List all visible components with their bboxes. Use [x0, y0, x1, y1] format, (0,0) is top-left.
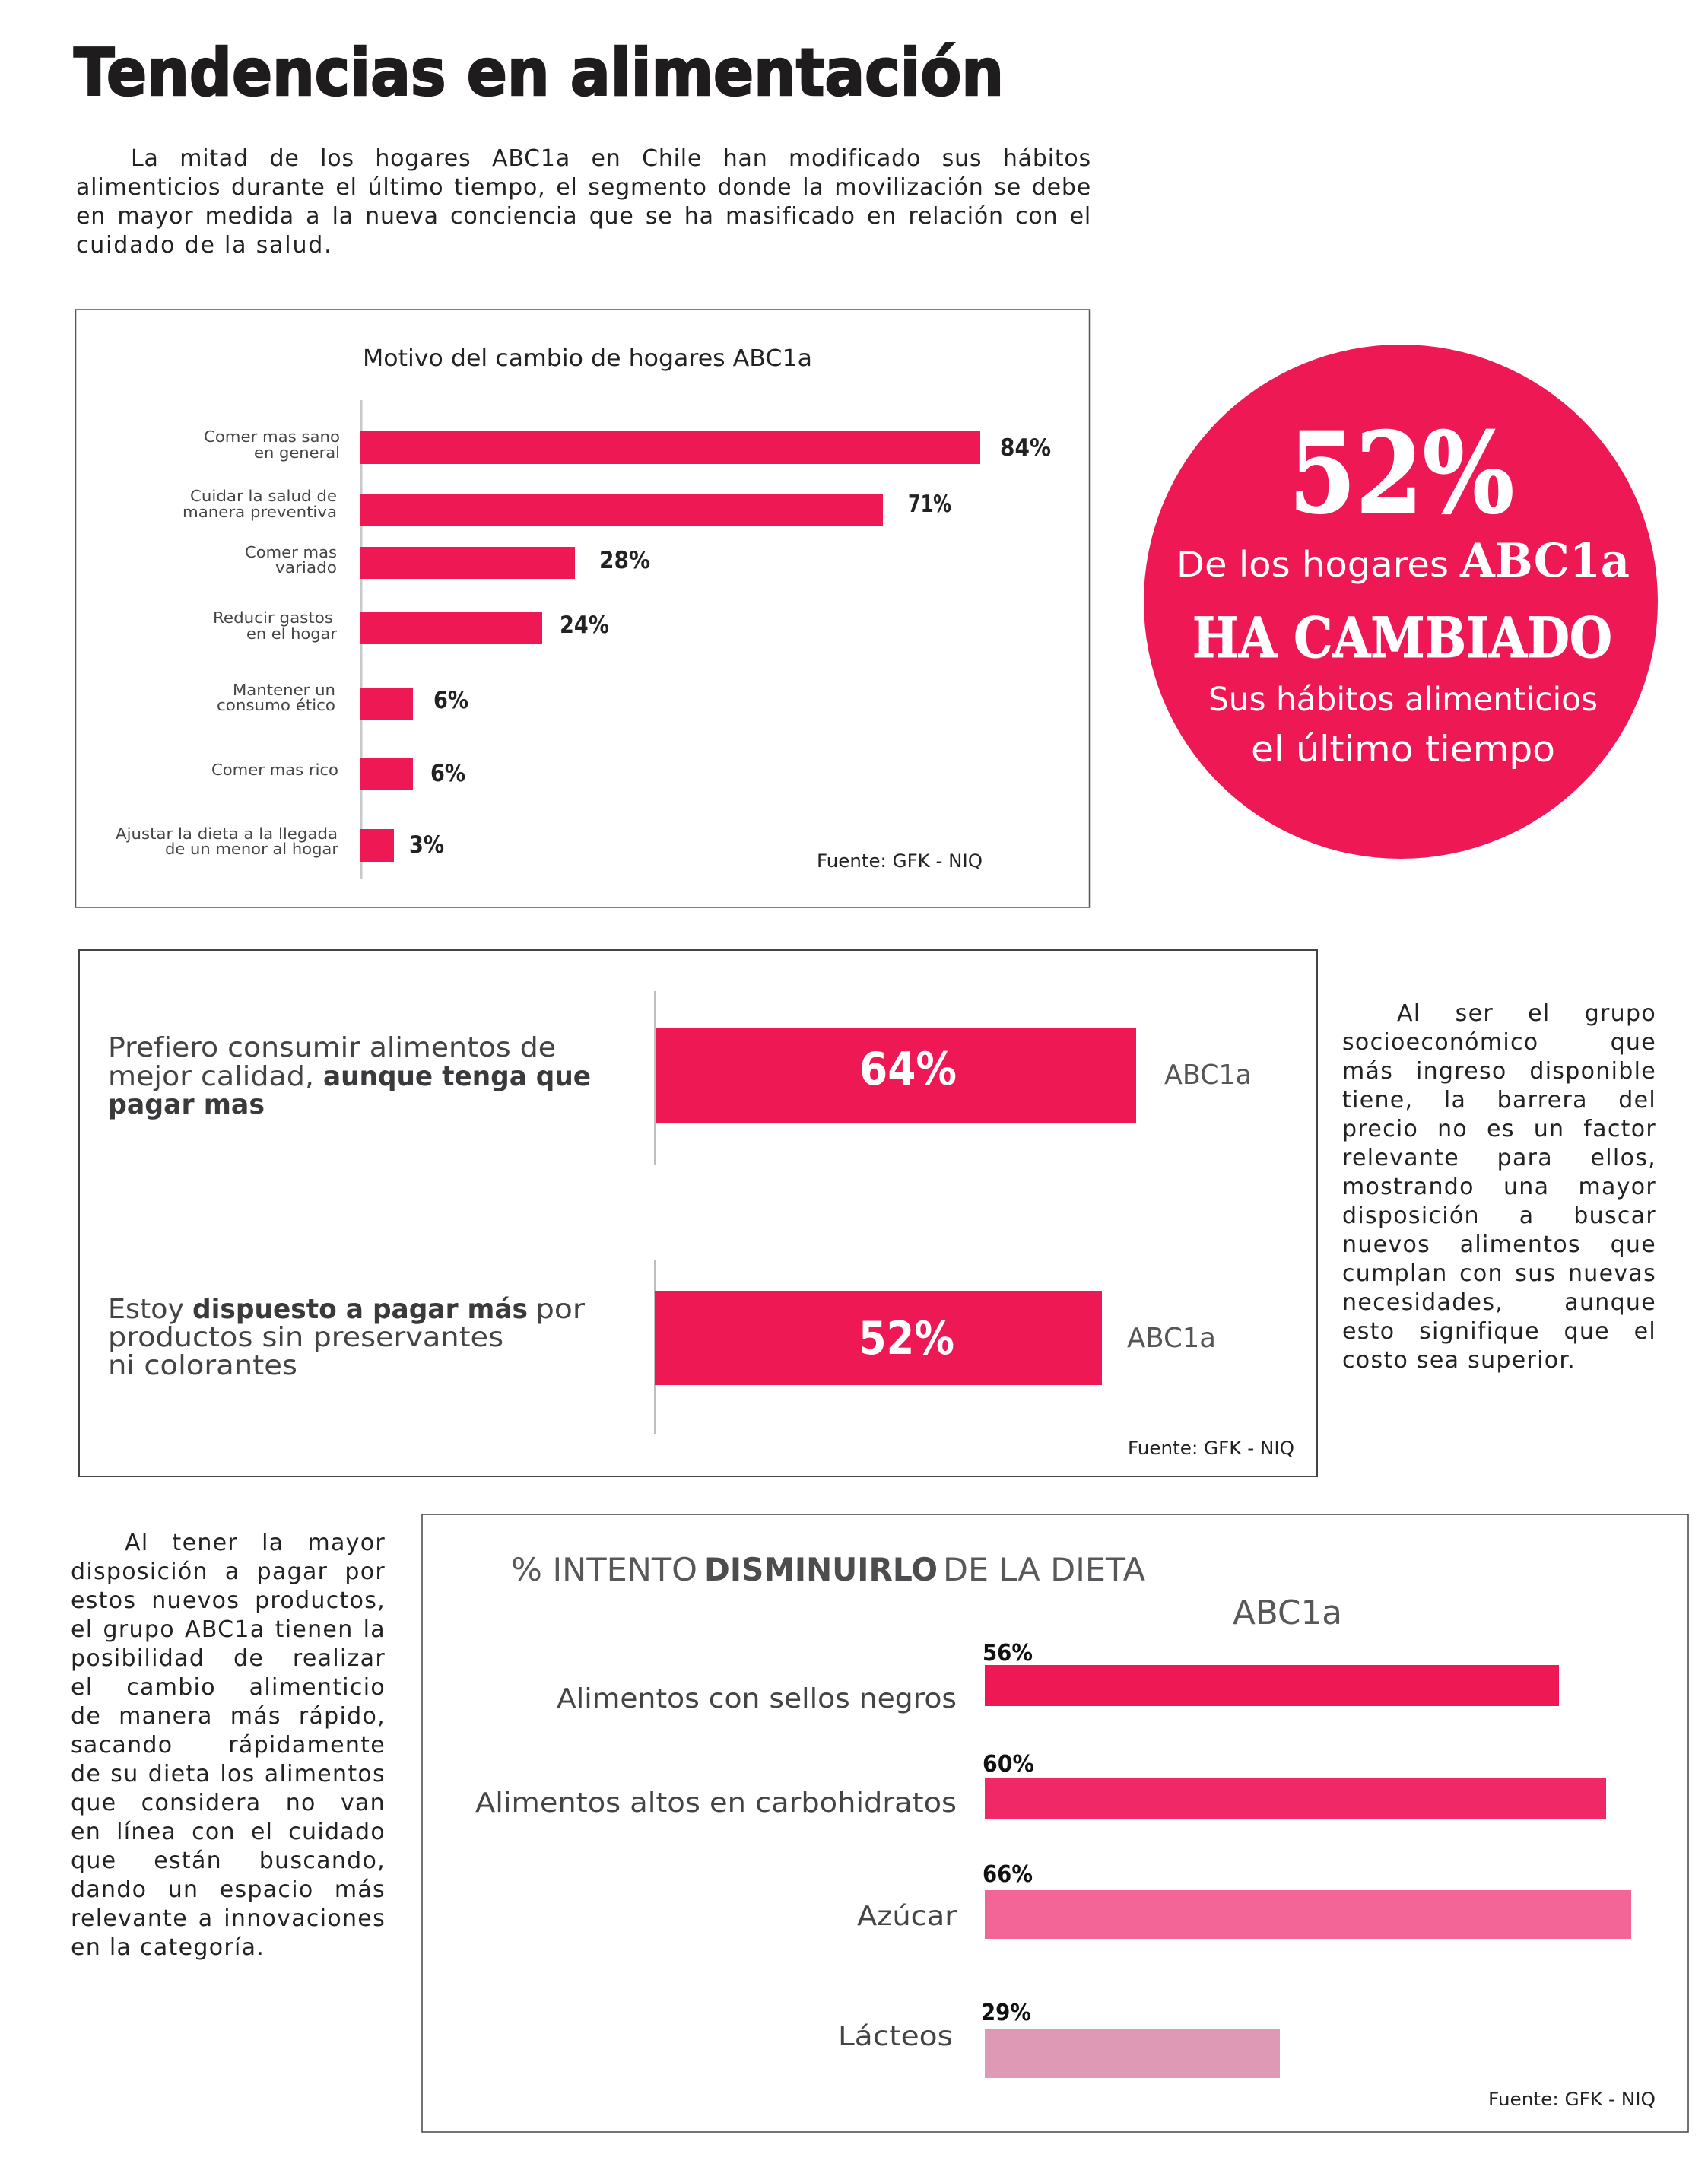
right paragraph: relevante para ellos, [1342, 1145, 1656, 1171]
bar: comer mas sano [204, 427, 1051, 464]
panel: disposicion a pagar [79, 950, 1317, 1476]
bar: sellos negros: Alimentos con sellos negros [557, 1683, 957, 1714]
bar: comer mas variado [245, 543, 650, 579]
bar 52% [655, 1291, 1216, 1385]
right paragraph: Al ser el grupo [1397, 1000, 1656, 1027]
intro paragraph: alimenticios durante el último tiempo, el segmento donde la movilización se debe [76, 174, 1091, 201]
chart heading: DISMINUIRLO [704, 1551, 938, 1588]
callout circle: 52%: Sus hábitos alimenticios [1208, 681, 1598, 719]
bar: comer mas sano: en general [254, 443, 340, 462]
statement 2: productos sin preservantes [108, 1322, 503, 1353]
bar: lacteos: 29% [981, 2000, 1031, 2026]
left paragraph: Al tener la mayor [125, 1530, 386, 1556]
bar: carbohidratos: 60% [983, 1751, 1034, 1778]
intro paragraph: cuidado de la salud. [76, 232, 332, 259]
bar: consumo etico: 6% [433, 687, 468, 714]
left paragraph: que considera no van [71, 1790, 386, 1816]
callout circle: 52%: 52% [1289, 408, 1514, 539]
left paragraph: relevante a innovaciones [71, 1905, 386, 1932]
statement 1 [108, 1032, 591, 1120]
left paragraph: disposición a pagar por [71, 1559, 386, 1585]
callout circle: 52% [1144, 345, 1658, 859]
bar: consumo etico: consumo ético [217, 696, 335, 714]
bar: carbohidratos [475, 1751, 1606, 1819]
bar: ajustar la dieta: Ajustar la dieta a la llegada [116, 825, 338, 843]
right paragraph: costo sea superior. [1342, 1347, 1576, 1374]
left paragraph: dando un espacio más [71, 1876, 386, 1903]
left paragraph: posibilidad de realizar [71, 1645, 386, 1672]
bar: cuidar la salud [183, 487, 951, 526]
bar: reducir gastos [213, 609, 609, 644]
left paragraph: que están buscando, [71, 1848, 386, 1874]
panel: motivo del cambio [76, 310, 1089, 907]
bar: consumo etico [217, 681, 468, 720]
bar: cuidar la salud: manera preventiva [183, 503, 337, 521]
bar: ajustar la dieta: de un menor al hogar [165, 840, 339, 858]
bar: sellos negros [557, 1640, 1559, 1714]
bar: azucar: Azúcar [857, 1901, 957, 1932]
right paragraph: disposición a buscar [1342, 1203, 1656, 1229]
bar: azucar: 66% [983, 1861, 1033, 1888]
right paragraph: tiene, la barrera del [1342, 1087, 1656, 1114]
bar: cuidar la salud: Cuidar la salud de [190, 487, 337, 505]
right paragraph: esto signifique que el [1342, 1318, 1656, 1345]
intro paragraph: La mitad de los hogares ABC1a en Chile han modificado sus hábitos [131, 145, 1091, 172]
callout circle: 52%: el último tiempo [1251, 729, 1555, 771]
statement 2 [108, 1294, 585, 1381]
bar: ajustar la dieta [116, 825, 444, 862]
statement 1: Prefiero consumir alimentos de [108, 1032, 556, 1063]
bar: comer mas rico: 6% [430, 760, 465, 787]
chart heading [511, 1551, 1145, 1588]
bar 64%: 64% [859, 1043, 957, 1096]
bar: comer mas variado: variado [275, 558, 337, 577]
bar 64%: ABC1a [1164, 1060, 1252, 1091]
subheading: ABC1a [1233, 1594, 1342, 1632]
right paragraph: nuevos alimentos que [1342, 1231, 1656, 1258]
statement 2: ni colorantes [108, 1350, 297, 1381]
source: Fuente: GFK - NIQ [1128, 1438, 1294, 1459]
bar 52%: 52% [859, 1312, 954, 1365]
left paragraph: en línea con el cuidado [71, 1819, 386, 1845]
right paragraph: socioeconómico que [1342, 1029, 1656, 1056]
bar: comer mas variado: Comer mas [245, 543, 337, 561]
chart heading: % INTENTO [511, 1551, 697, 1588]
bar: consumo etico: Mantener un [233, 681, 335, 699]
left paragraph: de manera más rápido, [71, 1703, 386, 1730]
left paragraph: el cambio alimenticio [71, 1674, 386, 1701]
left paragraph: estos nuevos productos, [71, 1587, 386, 1614]
bar: cuidar la salud: 71% [908, 491, 951, 518]
callout circle: 52%: ABC1a [1459, 534, 1630, 588]
right paragraph: necesidades, aunque [1342, 1289, 1656, 1316]
bar: reducir gastos: en el hogar [246, 624, 338, 643]
bar: lacteos [838, 2000, 1280, 2078]
bar: sellos negros: 56% [983, 1640, 1033, 1667]
right paragraph: cumplan con sus nuevas [1342, 1260, 1656, 1287]
left paragraph: de su dieta los alimentos [71, 1761, 386, 1787]
statement 1: aunque tenga que [323, 1061, 591, 1092]
left paragraph [71, 1530, 386, 1961]
intro paragraph [76, 145, 1091, 259]
statement 2: por [535, 1294, 585, 1325]
statement 2: Estoy [108, 1294, 184, 1325]
bar: carbohidratos: Alimentos altos en carbohidratos [475, 1787, 957, 1819]
source: Fuente: GFK - NIQ [1488, 2089, 1656, 2110]
statement 2: dispuesto a pagar más [192, 1294, 528, 1325]
left paragraph: sacando rápidamente [71, 1732, 386, 1759]
right paragraph: mostrando una mayor [1342, 1174, 1656, 1200]
statement 1: mejor calidad, [108, 1061, 314, 1092]
right paragraph: más ingreso disponible [1342, 1058, 1656, 1085]
right paragraph [1342, 1000, 1656, 1374]
bar: reducir gastos: Reducir gastos [213, 609, 333, 627]
chart heading: DE LA DIETA [943, 1551, 1145, 1588]
right paragraph: precio no es un factor [1342, 1116, 1656, 1142]
bar: comer mas rico [211, 758, 465, 790]
statement 1: pagar mas [108, 1089, 265, 1120]
bar: comer mas sano: Comer mas sano [204, 427, 340, 446]
bar: ajustar la dieta: 3% [409, 831, 444, 859]
bar: lacteos: Lácteos [838, 2021, 953, 2052]
bar: comer mas sano: 84% [1000, 434, 1051, 462]
bar: comer mas variado: 28% [599, 547, 650, 574]
panel: intento disminuirlo [422, 1514, 1688, 2132]
bar: reducir gastos: 24% [560, 612, 609, 639]
bar 64% [656, 1028, 1252, 1123]
intro paragraph: en mayor medida a la nueva conciencia que se ha masificado en relación con el [76, 203, 1091, 230]
callout circle: 52%: De los hogares [1176, 544, 1449, 585]
callout circle: 52%: HA CAMBIADO [1192, 605, 1612, 671]
bar 52%: ABC1a [1127, 1323, 1216, 1354]
chart title: Motivo del cambio de hogares ABC1a [363, 345, 812, 372]
left paragraph: en la categoría. [71, 1934, 265, 1961]
left paragraph: el grupo ABC1a tienen la [71, 1616, 386, 1643]
source: Fuente: GFK - NIQ [817, 850, 983, 872]
bar: azucar [857, 1861, 1631, 1939]
title: Tendencias en alimentación [74, 35, 1004, 111]
bar: comer mas rico: Comer mas rico [211, 761, 338, 779]
